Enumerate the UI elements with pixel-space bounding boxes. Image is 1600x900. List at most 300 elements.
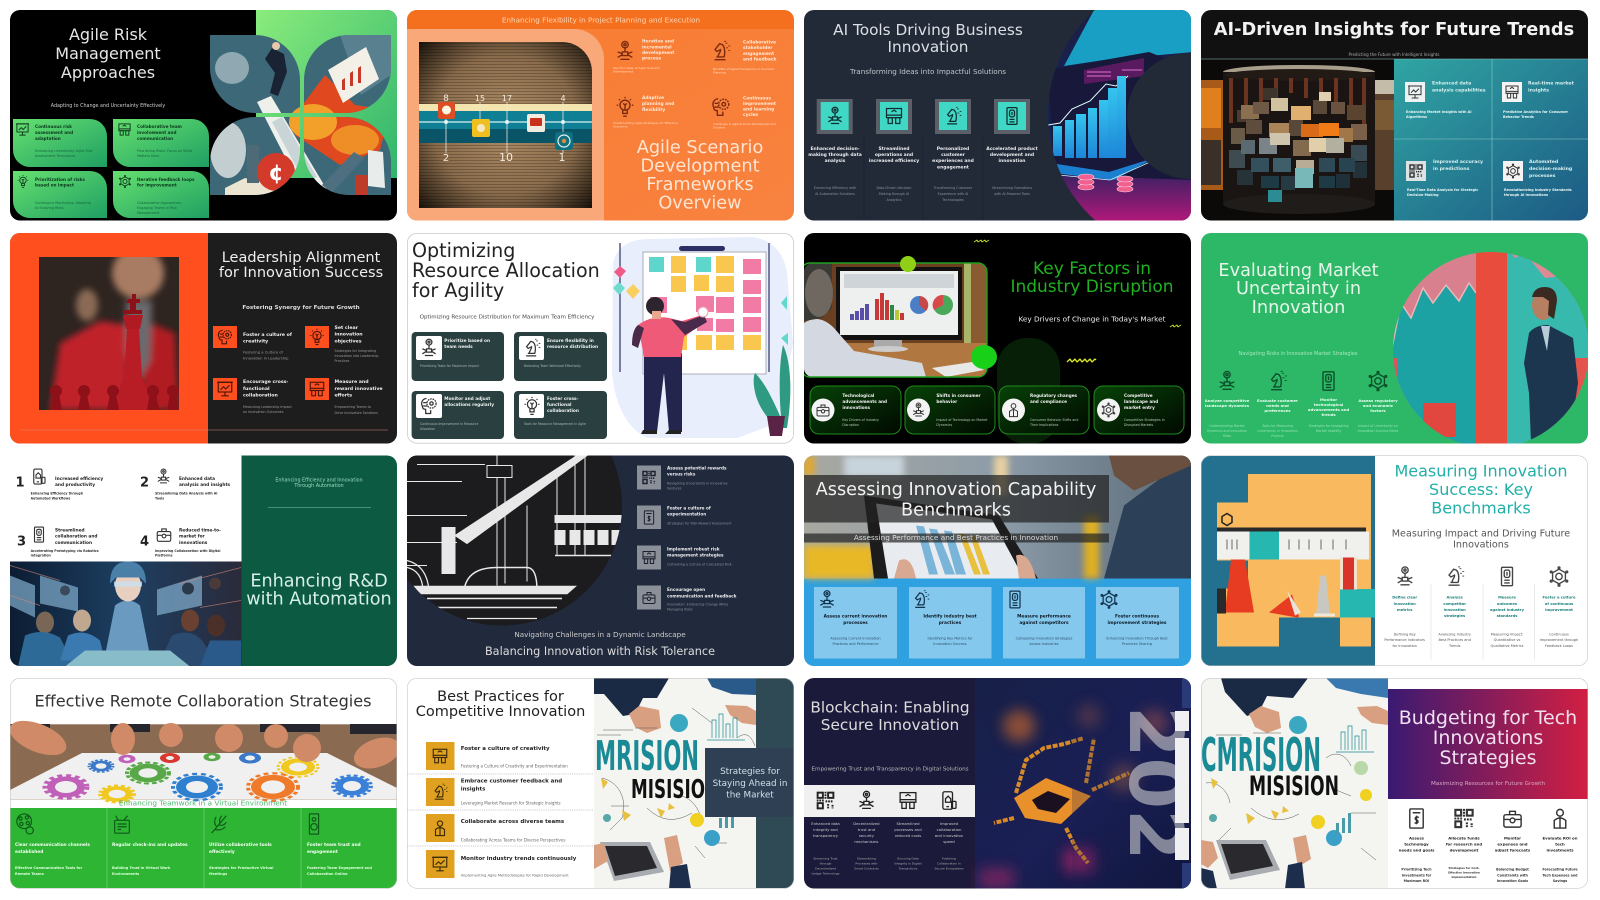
panel: Budgeting for Tech Innovations xyxy=(1201,678,1588,889)
item headings: stakeholder xyxy=(743,45,773,51)
item headings: Assess current innovation xyxy=(824,614,887,620)
item headings: Set clear xyxy=(334,325,359,331)
item headings: and feedback xyxy=(743,56,776,62)
callout text: Staying Ahead in xyxy=(713,779,787,789)
item headings: and learning xyxy=(743,106,774,112)
top band xyxy=(407,10,794,29)
item headings: transparency xyxy=(813,833,839,838)
item descriptions: on Innovation Outcomes xyxy=(243,410,284,414)
timeline image: 8 xyxy=(443,94,449,104)
item headings: Streamlined xyxy=(55,528,85,534)
item headings: communication and feedback xyxy=(667,594,737,598)
panel: Key Factors in Industry Disruption xyxy=(801,233,1191,444)
item headings: improvement strategies xyxy=(1107,620,1167,626)
item headings: Continuous risk xyxy=(35,124,72,129)
item headings: improvement xyxy=(743,101,776,107)
item headings: development xyxy=(642,50,674,56)
heading: Benchmarks xyxy=(1431,498,1531,518)
item descriptions: Quantitative vs xyxy=(1494,638,1521,642)
item headings: Analyze competitive xyxy=(1205,398,1250,403)
item headings: and economic xyxy=(1363,403,1394,408)
item headings: technological xyxy=(1314,402,1343,407)
item headings: Monitor industry trends continuously xyxy=(461,856,577,862)
item headings: Monitor and adjust xyxy=(444,396,490,402)
item headings: Encourage open xyxy=(667,587,705,592)
panel: Assessing Innovation Capability Benchmarks xyxy=(804,456,1191,666)
item headings: Monitor xyxy=(1504,836,1521,841)
item headings: Assess regulatory xyxy=(1358,398,1398,403)
item headings: Improved xyxy=(940,821,959,826)
column dividers xyxy=(1431,584,1534,660)
item headings xyxy=(1205,397,1398,417)
factor descriptions: Dynamics xyxy=(936,423,952,427)
item headings: making through data xyxy=(808,152,862,158)
item descriptions: Improving Collaboration with Digital xyxy=(155,549,220,553)
item headings: team needs xyxy=(444,344,473,350)
item headings: efforts xyxy=(334,393,352,399)
item headings: Enhanced data xyxy=(811,821,840,826)
heading: for Agility xyxy=(412,279,504,302)
item descriptions: Maximum ROI xyxy=(1404,879,1429,883)
card border xyxy=(407,233,794,444)
item headings: planning and xyxy=(642,101,674,107)
factor descriptions: Disruption xyxy=(842,423,859,427)
mission desk photo: MISISION xyxy=(1249,771,1339,802)
item headings: innovations xyxy=(179,540,208,546)
disc glyphs xyxy=(817,403,1115,417)
item headings: standards xyxy=(1497,614,1518,618)
item headings: security xyxy=(859,833,875,838)
item headings: processes xyxy=(1529,173,1556,179)
item descriptions: Balancing Team Workload Effectively xyxy=(524,364,581,368)
heading: Enhancing R&D xyxy=(250,572,388,592)
item icons xyxy=(17,814,319,834)
item icon tiles xyxy=(213,326,329,400)
heading: Resource Allocation xyxy=(412,259,600,282)
item descriptions xyxy=(461,764,569,878)
item headings xyxy=(642,39,776,118)
item icons xyxy=(1220,371,1387,391)
item headings: Collaborate across diverse teams xyxy=(461,819,565,825)
numbers xyxy=(15,476,149,550)
item headings: Evaluate ROI on xyxy=(1543,836,1578,841)
item headings: analysis and insights xyxy=(179,482,230,488)
item headings: innovation xyxy=(1444,608,1466,612)
band caption: Enhancing Flexibility in Project Planning and Execution xyxy=(502,16,700,24)
item headings: reward innovative xyxy=(334,386,383,392)
item headings: innovation xyxy=(334,332,363,338)
item headings: expenses and xyxy=(1497,842,1528,847)
desktop analysis photo xyxy=(804,263,987,377)
item descriptions: Management xyxy=(137,211,160,215)
item descriptions: Practices Sharing xyxy=(1122,642,1152,646)
item descriptions: Defining Key xyxy=(1394,632,1416,636)
item descriptions: Innovation: Embracing Change While xyxy=(667,602,728,606)
item descriptions: Prioritizing Risks: Focus on What xyxy=(137,149,193,153)
item headings: in predictions xyxy=(1433,166,1470,172)
item headings: Analyze xyxy=(1447,596,1463,600)
item descriptions: Revolutionizing Industry Standards xyxy=(1504,188,1572,192)
item headings: Reduced time-to- xyxy=(179,528,221,534)
card border xyxy=(1201,678,1588,888)
timeline image: 10 xyxy=(499,151,513,164)
heading: Industry Disruption xyxy=(1010,277,1174,297)
item descriptions xyxy=(1406,110,1572,197)
subtitle: Adapting to Change and Uncertainty Effectively xyxy=(51,103,165,109)
item descriptions: Constraints with xyxy=(1497,873,1528,877)
market chart photo xyxy=(1391,248,1591,448)
item headings: integrity and xyxy=(813,827,838,832)
item descriptions: Balancing Budget xyxy=(1496,868,1529,872)
item headings: analysis xyxy=(825,158,846,164)
item headings: collaboration xyxy=(243,393,278,399)
timeline image: 17 xyxy=(502,94,512,103)
item headings: increased efficiency xyxy=(869,158,919,164)
item headings: for improvement xyxy=(137,182,177,188)
mission desk photo xyxy=(1201,678,1388,889)
ruler illustration xyxy=(1217,474,1375,646)
panel: AI-Driven Insights for Future Trends xyxy=(1201,10,1588,221)
timeline image: 15 xyxy=(475,94,485,103)
item headings: flexibility xyxy=(642,107,665,113)
item headings: factors xyxy=(1370,408,1386,413)
band icons xyxy=(817,791,956,809)
item descriptions: Tools for Resource Management in Agile xyxy=(523,422,586,426)
item headings: involvement and xyxy=(137,130,176,135)
callout box xyxy=(705,748,794,817)
illustration: four-leaf risk collage: ¢ xyxy=(268,161,284,186)
item descriptions: Uncertainty in Innovation xyxy=(1257,429,1298,433)
factor headings: Competitive xyxy=(1124,393,1153,398)
item descriptions: Assessing Current Innovation xyxy=(830,636,881,640)
item headings: process xyxy=(642,56,662,62)
item descriptions: Smart Contracts xyxy=(854,866,879,870)
panel: AI Tools Driving Business Innovation xyxy=(804,10,1191,220)
item descriptions: Risks xyxy=(1223,434,1231,438)
item descriptions: Collaboration in xyxy=(937,862,961,866)
item headings xyxy=(461,746,577,862)
item descriptions: Effective Innovation xyxy=(1448,870,1480,874)
item descriptions: Ledger Technology xyxy=(811,872,840,876)
item descriptions: Navigating Uncertainty in Innovative xyxy=(667,482,728,486)
item descriptions: Challenges in Agile Scenario Development and xyxy=(713,122,776,126)
item headings: based on impact xyxy=(35,182,74,188)
item descriptions: Comparing Innovation Strategies xyxy=(1016,636,1073,640)
factor headings: Shifts in consumer xyxy=(936,393,981,398)
item headings: Measure and xyxy=(334,379,369,385)
heading: Agile Scenario xyxy=(637,138,763,158)
item descriptions: Continuous xyxy=(1549,632,1569,636)
factor descriptions: Disrupted Markets xyxy=(1124,423,1154,427)
mission desk photo: CMRISION xyxy=(1201,728,1321,782)
heading: Effective Remote Collaboration Strategies xyxy=(34,692,372,711)
item headings: Increased efficiency xyxy=(55,476,103,482)
item descriptions xyxy=(830,636,1168,646)
item icons xyxy=(1405,82,1523,181)
item headings: speed xyxy=(943,839,955,844)
item descriptions: Technologies xyxy=(941,198,964,202)
heading: Secure Innovation xyxy=(821,716,959,734)
item descriptions: Effective Communication Tools for xyxy=(15,866,82,870)
item descriptions: for Innovation xyxy=(1392,644,1417,648)
item headings: metrics xyxy=(1397,608,1413,612)
item descriptions: Environments xyxy=(112,872,139,876)
item headings: Prioritize based on xyxy=(444,338,490,344)
mission desk photo xyxy=(594,678,756,889)
item headings: Evaluate customer xyxy=(1257,398,1298,403)
orange column xyxy=(10,233,208,444)
item descriptions: Understanding Market xyxy=(1209,424,1245,428)
timeline image xyxy=(419,42,592,208)
item descriptions: to Evolving Risks xyxy=(35,206,64,210)
heading: Key Factors in xyxy=(1033,259,1151,279)
item descriptions: Key Principles of Agile Scenario xyxy=(613,66,660,70)
item headings: Enhanced decision- xyxy=(810,146,860,152)
item headings: Improved accuracy xyxy=(1433,159,1483,165)
panel: Blockchain Enabling Secure Innovation xyxy=(804,678,1198,889)
item descriptions: Tools xyxy=(155,496,164,500)
item descriptions: Fostering xyxy=(942,857,956,861)
item descriptions: Identifying Key Metrics for xyxy=(927,636,973,640)
item headings: communication xyxy=(55,540,92,546)
factor headings: behavior xyxy=(936,399,958,404)
item headings: management strategies xyxy=(667,552,724,558)
item descriptions: Engaging Teams in Risk xyxy=(137,206,177,210)
item descriptions: Accelerating Prototyping via Robotics xyxy=(31,549,99,553)
factor headings: advancements and xyxy=(842,399,887,404)
item descriptions: Tech Expenses and xyxy=(1542,873,1578,877)
item headings: decision-making xyxy=(1529,166,1572,172)
item descriptions xyxy=(420,364,586,431)
callout text: the Market xyxy=(726,790,774,800)
item headings: outcomes xyxy=(1497,602,1518,606)
item headings: experimentation xyxy=(667,512,706,516)
item descriptions: AI Automation Solutions xyxy=(815,192,855,196)
item descriptions: Innovation Success Rates xyxy=(1358,429,1399,433)
panel: Agile Scenario Development Frameworks xyxy=(407,10,794,221)
heading: Competitive Innovation xyxy=(416,704,585,720)
item headings: Foster team trust and xyxy=(307,842,361,848)
item headings: Real-time market xyxy=(1528,80,1575,86)
item descriptions: Qualitative Metrics xyxy=(1491,644,1524,648)
panel: Effective Remote Collaboration xyxy=(5,678,404,889)
item headings: development xyxy=(1450,848,1478,852)
factor descriptions: Consumer Behavior Shifts and xyxy=(1030,418,1078,422)
green column xyxy=(242,456,397,666)
item headings: Iterative and xyxy=(642,39,674,45)
item descriptions: Investments for xyxy=(1402,873,1432,877)
timeline image: 2 xyxy=(443,153,449,164)
heading: Leadership Alignment xyxy=(222,250,381,266)
subtitle overlay xyxy=(804,534,1109,542)
item headings: processes and xyxy=(894,827,922,832)
item descriptions: Feedback Loops xyxy=(1545,644,1573,648)
item descriptions: Strategies for Risk-Reward Assessment xyxy=(667,522,732,526)
heading: AI Tools Driving Business xyxy=(833,21,1023,39)
item descriptions: Transforming Customer xyxy=(933,186,973,190)
panel: Enhancing R&D with Automation xyxy=(10,456,397,666)
item headings: Automated xyxy=(1529,159,1558,165)
heading: Measuring Innovation xyxy=(1394,462,1568,480)
item descriptions: Performance Indicators xyxy=(1384,638,1425,642)
item headings: development and xyxy=(990,152,1034,158)
item headings: preferences xyxy=(1264,408,1291,413)
item descriptions: Managing Risks xyxy=(667,608,693,612)
column rule xyxy=(268,506,371,508)
heading: Frameworks xyxy=(646,175,754,195)
item headings: innovation xyxy=(1394,602,1416,606)
subtitle: Navigating Risks in Innovative Market Strategies xyxy=(1239,351,1358,357)
dark green hump xyxy=(997,338,1060,444)
item headings: practices xyxy=(939,620,962,626)
item icons xyxy=(1410,809,1566,828)
item descriptions: with AI-Powered Tools xyxy=(994,192,1030,196)
item headings: advancements and xyxy=(1308,407,1350,412)
numbers: 3 xyxy=(17,534,26,550)
title gradient band xyxy=(1388,689,1588,799)
panel: Best Practices for Competitive Innovation xyxy=(407,678,794,889)
item headings: operations and xyxy=(875,152,913,158)
column separators xyxy=(864,135,983,221)
item cards xyxy=(814,587,1179,658)
data cylinder image xyxy=(1201,59,1394,221)
item headings: cycles xyxy=(743,112,759,118)
factor descriptions: Impact of Technology on Market xyxy=(936,418,988,422)
item headings xyxy=(35,124,195,188)
line-art building circle xyxy=(377,386,627,630)
item descriptions: Innovation into Leadership xyxy=(334,354,378,358)
item headings xyxy=(1399,836,1578,852)
item headings: experiences and xyxy=(932,158,974,164)
item headings: Foster cross- xyxy=(547,396,579,402)
item descriptions: Improvement through xyxy=(1540,638,1578,642)
item headings: engagement xyxy=(307,849,338,855)
chain photo: 202 xyxy=(1112,706,1198,860)
item headings: Monitor xyxy=(1320,397,1337,402)
item descriptions: Implementation xyxy=(1451,875,1477,879)
item descriptions: Practices and Performance xyxy=(833,642,878,646)
factor headings: innovations xyxy=(842,405,871,410)
photo caption: Enhancing Teamwork in a Virtual Environment xyxy=(119,799,287,808)
mission desk photo: MISISIO xyxy=(631,775,705,805)
item descriptions: Predictive Analytics for Consumer xyxy=(1503,110,1568,114)
item descriptions: Continuous Improvement in Resource xyxy=(420,422,478,426)
subtitle: Predicting the Future with Intelligent Insights xyxy=(1349,52,1439,57)
item headings: investments xyxy=(1546,848,1574,852)
item headings: Implement robust risk xyxy=(667,546,720,552)
item descriptions: Collaborative Approaches: xyxy=(137,201,182,205)
item descriptions: Analytics xyxy=(887,198,902,202)
column dividers xyxy=(107,808,301,889)
item headings: Embrace customer feedback and xyxy=(461,779,562,785)
item headings: engagement xyxy=(743,51,774,57)
item headings: for research and xyxy=(1446,842,1482,847)
icon tiles xyxy=(817,99,1030,134)
card border xyxy=(10,678,397,888)
item headings: Adaptive xyxy=(642,95,664,101)
item headings: and innovation xyxy=(935,833,964,838)
item descriptions: Data-Driven Decision xyxy=(876,186,912,190)
item headings: communication xyxy=(137,136,173,141)
factor headings: market entry xyxy=(1124,405,1155,410)
item descriptions: Scenarios xyxy=(613,124,628,128)
item headings: established xyxy=(15,849,43,855)
item headings: technology xyxy=(1404,842,1429,847)
panel: Measuring Innovation Success xyxy=(1201,456,1588,666)
factor headings: landscape and xyxy=(1124,399,1158,404)
subtitle: Optimizing Resource Distribution for Maximum Team Efficiency xyxy=(420,314,595,320)
item descriptions: through AI Innovations xyxy=(1504,193,1548,197)
card border xyxy=(407,678,794,888)
item headings: Regular check-ins and updates xyxy=(112,842,188,848)
item descriptions: Enhancing Trust xyxy=(814,857,838,861)
item descriptions xyxy=(1401,866,1578,883)
item descriptions: Innovation Success xyxy=(933,642,967,646)
heading: Balancing Innovation with Risk Tolerance xyxy=(485,645,715,658)
kanban illustration xyxy=(612,237,793,438)
item descriptions: through xyxy=(820,862,831,866)
item headings: mechanisms xyxy=(854,839,878,844)
factor headings: and compliance xyxy=(1030,399,1067,404)
factor headings xyxy=(842,393,1158,410)
item headings: Foster a culture of creativity xyxy=(461,746,550,752)
panel: Agile Risk Management Approaches xyxy=(10,10,397,221)
tile glyphs xyxy=(642,471,655,604)
item descriptions xyxy=(31,492,220,558)
item headings: Decentralized xyxy=(853,821,880,826)
item headings: Enhanced data xyxy=(179,476,215,482)
item descriptions: Behavior Trends xyxy=(1503,115,1534,119)
heading: Innovation xyxy=(888,38,968,56)
callout text: Strategies for xyxy=(720,767,780,777)
item descriptions: Development xyxy=(613,70,634,74)
item descriptions xyxy=(667,482,732,612)
item icons xyxy=(1398,566,1568,586)
item headings: Measure performance xyxy=(1017,614,1071,620)
heading: Management xyxy=(55,44,161,63)
item descriptions xyxy=(15,866,372,876)
tile glyphs xyxy=(828,107,1017,124)
heading: Evaluating Market xyxy=(1218,261,1379,281)
subtitle: Fostering Synergy for Future Growth xyxy=(242,305,360,311)
item headings: Measure xyxy=(1498,596,1516,600)
icon plates xyxy=(416,336,544,418)
item descriptions: Building Trust in Virtual Work xyxy=(112,866,171,870)
pawns xyxy=(50,385,179,410)
item descriptions: Measuring Leadership Impact xyxy=(243,405,292,409)
item descriptions: Enhancing Efficiency with xyxy=(814,186,856,190)
item descriptions: Tools for Measuring xyxy=(1261,424,1293,428)
item headings: strategies xyxy=(1444,614,1466,618)
item descriptions: Dynamics and Innovation xyxy=(1207,429,1247,433)
subtitle: Maximizing Resources for Future Growth xyxy=(1431,781,1545,787)
item descriptions: Fostering a Culture of Creativity and Experimentation xyxy=(461,764,568,769)
factor headings: Technological xyxy=(842,393,875,398)
item headings: Prioritization of risks xyxy=(35,177,85,182)
tablet photo xyxy=(804,456,1191,578)
item headings: insights xyxy=(1528,88,1549,94)
dark strip xyxy=(756,678,794,889)
tile glyphs xyxy=(217,329,324,396)
item descriptions: Prioritizing Tasks for Maximum Impact xyxy=(420,364,480,368)
item headings: Accelerated product xyxy=(986,146,1039,152)
item descriptions: Implementing Agile Strategies for Effective xyxy=(613,121,678,125)
item headings xyxy=(808,146,1039,170)
item descriptions: Embracing Uncertainty: Agile Risk xyxy=(35,149,93,153)
dashed dividers xyxy=(407,774,594,846)
item headings xyxy=(55,476,230,546)
item descriptions: Strategies for Productive Virtual xyxy=(209,866,273,870)
